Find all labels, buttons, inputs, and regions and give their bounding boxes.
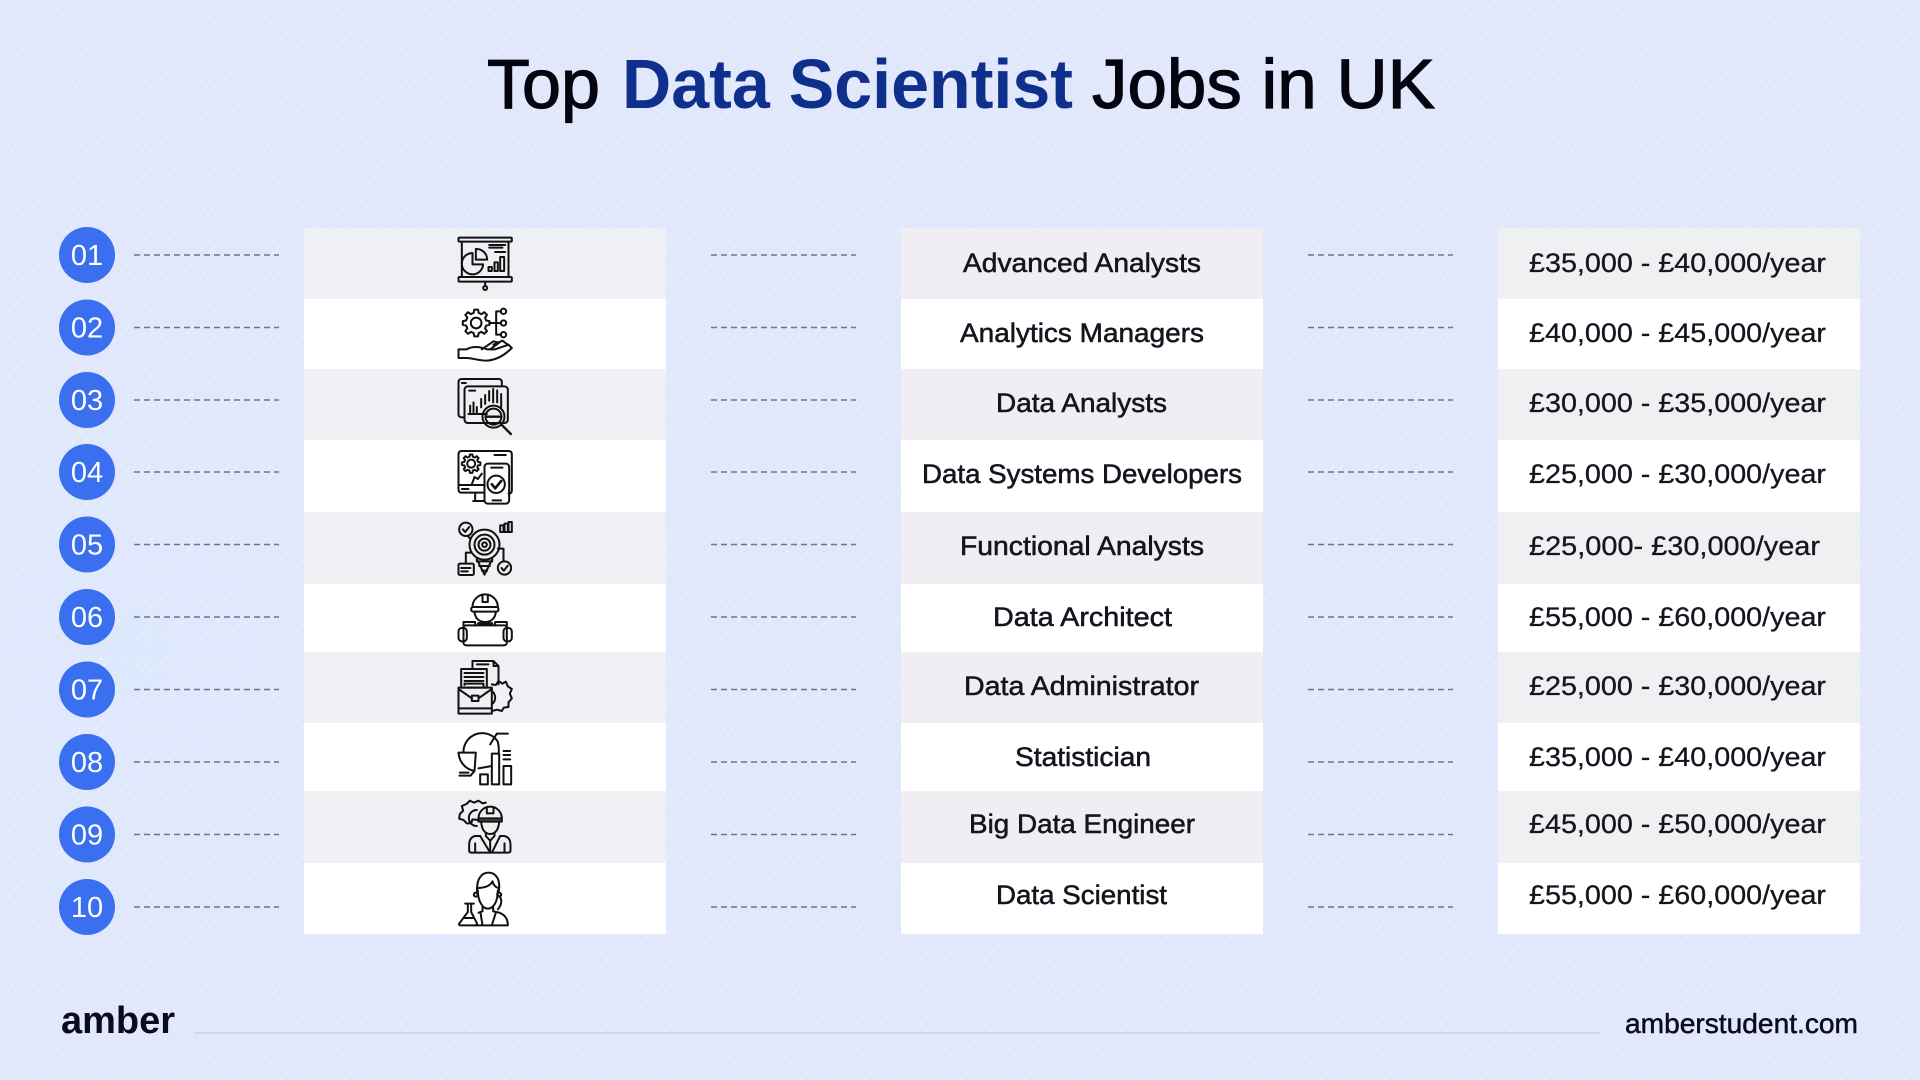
number badge 01: 01 [71,240,103,272]
number badge 05 [59,516,115,572]
number badge 04: 04 [71,457,103,489]
salary 07: £25,000 - £30,000/year [1529,671,1826,701]
job title 07: Data Administrator [964,671,1199,701]
number badge 05: 05 [71,530,103,562]
number badge 04 [59,444,115,500]
icon: presentation board [458,238,512,290]
number badge 08 [59,734,115,790]
job title 06: Data Architect [993,602,1173,632]
number badge 06: 06 [71,602,103,634]
job title 10: Data Scientist [996,880,1168,910]
job title 04: Data Systems Developers [922,459,1242,489]
salary 06: £55,000 - £60,000/year [1529,602,1826,632]
icon: devices with settings [458,451,512,504]
title: Data Scientist [622,45,1073,123]
icon: scientist with flask [459,873,508,925]
icon: statistics pie and bars [458,733,511,784]
job title 05: Functional Analysts [960,531,1204,561]
website: amberstudent.com: amberstudent.com [1625,1008,1858,1039]
salary 03: £30,000 - £35,000/year [1529,388,1826,418]
logo: amber: amber [61,1000,175,1042]
number badge 06 [59,589,115,645]
salary 05: £25,000- £30,000/year [1529,531,1820,561]
salary 04: £25,000 - £30,000/year [1529,459,1826,489]
number badge 08: 08 [71,747,103,779]
column backgrounds: icons, job titles, salaries [304,228,1860,934]
title: Jobs in UK [1092,45,1435,123]
salary 10: £55,000 - £60,000/year [1529,880,1826,910]
salary 01: £35,000 - £40,000/year [1529,248,1826,278]
title [487,45,1435,123]
job title 01: Advanced Analysts [963,248,1201,278]
icon: gear and hand [458,309,512,361]
salary 09: £45,000 - £50,000/year [1529,809,1826,839]
salary 08: £35,000 - £40,000/year [1529,742,1826,772]
job title 09: Big Data Engineer [969,809,1195,839]
number badge 10 [59,879,115,935]
number badge 02: 02 [71,312,103,344]
number badge 03 [59,372,115,428]
job title 08: Statistician [1015,742,1151,772]
number badge 01 [59,227,115,283]
icon: briefcase and documents [458,661,512,714]
number badge 03: 03 [71,385,103,417]
icon: data analysis magnifier [458,379,511,434]
title: Top [487,45,600,123]
number badge 02 [59,300,115,356]
number badge 07: 07 [71,674,103,706]
job title 03: Data Analysts [996,388,1167,418]
icon: engineer with blueprint [458,594,512,645]
number badge 09: 09 [71,820,103,852]
job title 02: Analytics Managers [960,318,1204,348]
salary 02: £40,000 - £45,000/year [1529,318,1826,348]
number badge 09 [59,806,115,862]
icon: engineer with gear [459,801,510,853]
number badge 07 [59,662,115,718]
icon: idea bulb target [458,522,512,575]
number badge 10: 10 [71,892,103,924]
